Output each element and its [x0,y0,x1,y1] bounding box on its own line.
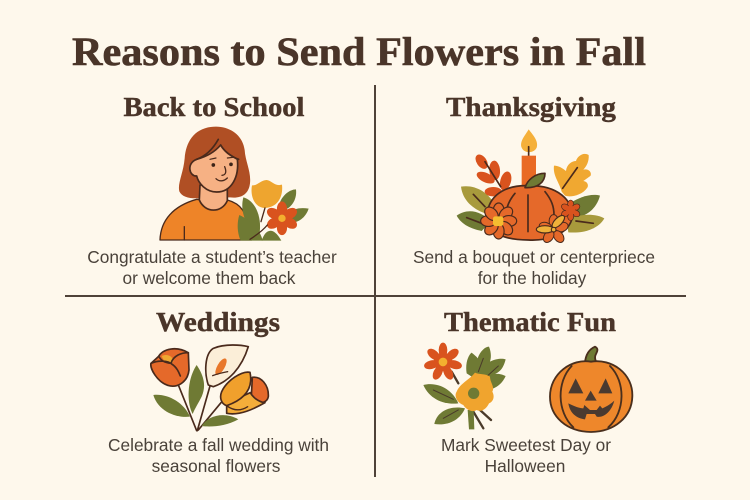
heading: thanksgiving: Thanksgiving [446,92,617,122]
description: back to school: or welcome them back [123,268,296,288]
description: back to school: Congratulate a student’s teacher [87,247,337,267]
icon: wedding bouquet [151,345,268,431]
description: thematic fun: Mark Sweetest Day or [441,435,611,455]
heading: weddings: Weddings [156,307,280,337]
heading: thematic fun: Thematic Fun [444,307,616,337]
icon: pumpkin centerpiece with candle [457,129,604,244]
panel: thanksgiving [413,92,655,288]
vertical divider [374,85,376,477]
description: thanksgiving: Send a bouquet or centerpriece [413,247,655,267]
horizontal divider [65,295,686,297]
description: thematic fun: Halloween [485,456,565,476]
icon: jack-o-lantern [550,347,632,432]
panel: weddings [108,307,329,476]
icon: flower bunch [423,343,506,429]
heading: back to school: Back to School [124,92,305,122]
title: Reasons to Send Flowers in Fall [72,29,646,74]
description: weddings: seasonal flowers [152,456,281,476]
icon: woman with flowers [160,127,309,241]
description: weddings: Celebrate a fall wedding with [108,435,329,455]
panel: back to school [87,92,337,288]
panel: thematic fun [423,307,632,476]
description: thanksgiving: for the holiday [478,268,587,288]
